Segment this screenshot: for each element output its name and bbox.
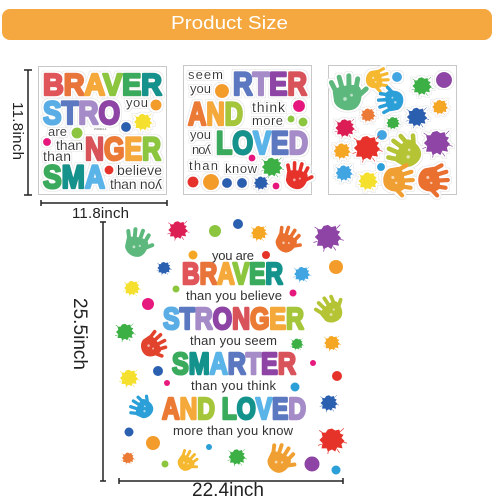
splat: blue (157, 262, 172, 275)
blob: orange (203, 174, 219, 190)
dot (164, 380, 170, 386)
blob: orange (146, 436, 160, 450)
dot (150, 100, 162, 110)
dot (290, 382, 300, 392)
splat: orange (432, 100, 449, 115)
dimension: sheet height (9, 70, 32, 195)
dot (209, 225, 221, 237)
dot (188, 176, 198, 188)
splat: blue (253, 176, 269, 191)
hand: yellow (175, 449, 202, 476)
splat: sky (294, 267, 311, 282)
sticker word: than you inverted: than noʎ (110, 176, 162, 192)
dot (377, 163, 385, 171)
dot (222, 178, 232, 188)
hand: orange (381, 165, 415, 198)
splat: yellow (133, 114, 154, 132)
panel: word sticker sheet 2 (184, 66, 313, 194)
sticker word: LOVED: LOVED (216, 125, 308, 161)
sticker word: you inverted: noʎ (192, 142, 212, 157)
hand: red (285, 162, 313, 191)
splat: green (261, 158, 284, 178)
blob: orange (215, 84, 229, 98)
sticker word: know: know (225, 161, 258, 176)
dot (104, 166, 114, 174)
dot (310, 360, 316, 366)
dot (332, 371, 342, 381)
dot (262, 251, 270, 259)
dot (304, 456, 320, 472)
splat: green (386, 117, 401, 130)
sticker word: NGER: NGER (85, 131, 161, 167)
poster line: than you think: than you think (191, 378, 276, 393)
dot (288, 116, 294, 122)
splat: orange (122, 452, 135, 464)
sticker word: believe: believe (117, 162, 162, 178)
sticker word: than: than (56, 137, 83, 153)
dot (436, 72, 452, 88)
poster word: STRONGER: STRONGER (163, 301, 304, 336)
hand: yellow-green (314, 291, 350, 327)
splat: purple (423, 131, 452, 157)
splat: orange (324, 336, 341, 351)
sticker word: seem: seem (188, 67, 223, 82)
sticker word: are: are (48, 124, 67, 139)
sticker word: you: you (190, 127, 211, 142)
dimension: poster height (69, 222, 106, 481)
poster: assembled wall decal (115, 219, 350, 478)
dot (188, 250, 198, 260)
dot (392, 72, 402, 82)
dot (172, 286, 180, 292)
sticker word: than: than (189, 158, 218, 173)
dot (293, 100, 305, 112)
label: 11.8inch horizontal: 11.8inch (72, 205, 129, 222)
dot (153, 366, 163, 376)
splat: orange (360, 108, 376, 123)
dot (237, 178, 247, 188)
splat: sky (335, 165, 354, 182)
splat: green (115, 324, 136, 342)
sticker word: you: you (126, 95, 148, 110)
splat: purple (314, 225, 343, 251)
splat: green (228, 449, 247, 466)
poster word: SMARTER: SMARTER (172, 346, 296, 381)
sheet code: ZJ0001-1 (94, 127, 107, 131)
splat: red (318, 428, 347, 454)
splat: blue (320, 395, 339, 412)
sticker word: more: more (252, 113, 283, 128)
poster word: BRAVER: BRAVER (182, 256, 283, 291)
hand: orange-red (416, 165, 450, 198)
dimension: poster width (119, 478, 343, 500)
dot (329, 260, 343, 274)
splat: crimson (335, 119, 356, 138)
dimension: sheet width (41, 200, 167, 222)
hand: red (137, 330, 171, 364)
sticker word: RTER: RTER (233, 66, 307, 102)
label: 11.8inch vertical: 11.8inch (9, 102, 26, 160)
hand: yellow-green (385, 128, 428, 171)
splat: orange (333, 143, 352, 160)
heading: product size: Product Size (171, 13, 288, 33)
panel: word sticker sheet 1 (38, 66, 166, 195)
dot (72, 128, 82, 138)
dot (142, 298, 154, 310)
dot (233, 219, 243, 229)
sticker word: than: than (43, 148, 71, 164)
splat: crimson (168, 221, 189, 240)
poster words: AND LOVED: AND LOVED (162, 391, 306, 426)
hand: green (123, 228, 155, 260)
dot (206, 444, 212, 450)
splat: yellow (119, 370, 140, 388)
hand: sky (128, 392, 158, 421)
dot (377, 130, 387, 140)
header banner (2, 9, 492, 40)
dot (272, 182, 280, 190)
hand: sky (377, 85, 405, 113)
splat: green (412, 77, 433, 96)
splat: green (290, 338, 304, 350)
splat: blue (406, 108, 429, 128)
dot (248, 154, 256, 162)
sticker word: think: think (252, 99, 286, 115)
splat: yellow (358, 172, 379, 191)
dot (124, 428, 134, 436)
dot (43, 138, 51, 146)
splat: orange (251, 226, 268, 241)
sticker word: AND: AND (188, 96, 243, 132)
poster line: than you seem: than you seem (190, 333, 277, 348)
dot (162, 460, 168, 468)
hand: yellow (364, 68, 390, 93)
dot (332, 466, 340, 474)
sticker word: you: you (190, 81, 211, 96)
hand: green (331, 74, 369, 112)
poster line: than you believe: than you believe (186, 288, 282, 303)
splat: red (353, 136, 382, 162)
panel: paint sticker sheet 3 (328, 66, 456, 198)
label: 25.5inch: 25.5inch (69, 298, 90, 370)
sticker word: STRO: STRO (43, 95, 120, 131)
dot (121, 122, 131, 132)
poster line: more than you know: more than you know (173, 423, 294, 438)
sticker word: BRAVER: BRAVER (43, 67, 162, 102)
hand: orange (264, 442, 300, 478)
splat: yellow (124, 281, 141, 296)
hand: orange-red (273, 225, 305, 257)
sticker word: SMA: SMA (43, 159, 105, 195)
dot (290, 290, 296, 296)
dot (298, 118, 308, 126)
poster line: you are: you are (212, 248, 254, 263)
